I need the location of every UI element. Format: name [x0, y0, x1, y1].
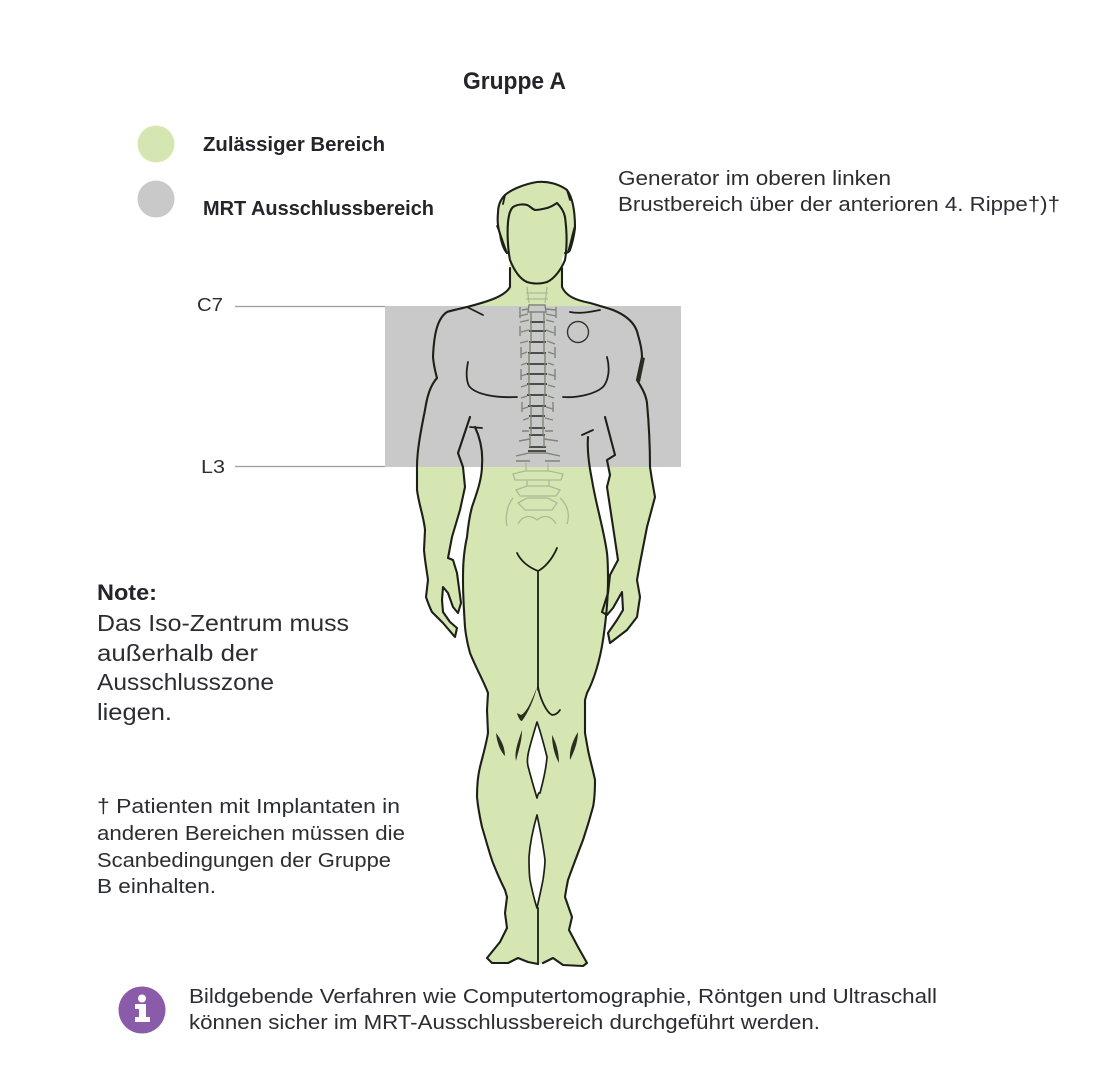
level label C7: C7	[197, 295, 223, 315]
footnote	[97, 796, 405, 898]
legend	[138, 126, 434, 220]
note block: liegen.	[97, 699, 172, 725]
legend swatch: exclusion area	[138, 180, 174, 218]
footnote: Scanbedingungen der Gruppe	[97, 850, 391, 872]
generator implant	[568, 322, 588, 342]
leg gaps	[527, 722, 547, 908]
chest and crotch lines	[467, 307, 609, 964]
level label L3: L3	[201, 457, 225, 477]
footnote: anderen Bereichen müssen die	[97, 823, 405, 845]
footnote: † Patienten mit Implantaten in	[97, 796, 400, 818]
note block	[97, 580, 349, 725]
spine	[516, 287, 560, 461]
right leg outline	[543, 437, 608, 966]
footnote: B einhalten.	[97, 876, 216, 898]
C7 level line	[235, 306, 385, 308]
note block: Note:	[97, 580, 157, 605]
generator note: Generator im oberen linken	[618, 168, 891, 190]
note block: Das Iso-Zentrum muss	[97, 610, 349, 636]
right arm and shoulder outline	[562, 268, 655, 643]
legend swatch: permitted area	[138, 126, 174, 162]
head and hair outline	[498, 182, 575, 253]
icon: info	[118, 986, 166, 1034]
body outline	[417, 182, 655, 966]
knee marks	[496, 730, 578, 763]
imaging note: Bildgebende Verfahren wie Computertomographie, Röntgen und Ultraschall	[189, 986, 937, 1008]
thigh creases	[517, 687, 537, 721]
generator note	[618, 168, 1060, 216]
left arm and shoulder outline	[417, 268, 510, 637]
face outline	[508, 217, 566, 284]
lower spine and pelvis	[506, 463, 568, 526]
note block: Ausschlusszone	[97, 669, 274, 695]
L3 level line	[235, 466, 385, 468]
title: Gruppe A	[463, 68, 566, 95]
generator note: Brustbereich über der anterioren 4. Rippe†)†	[618, 194, 1060, 216]
torso and left leg outline	[463, 427, 538, 964]
body fill	[417, 182, 655, 966]
imaging note	[189, 986, 937, 1034]
legend label: exclusion area: MRT Ausschlussbereich	[203, 198, 434, 220]
exclusion zone band	[385, 306, 681, 467]
body figure with exclusion zone	[235, 182, 681, 966]
legend label: permitted area: Zulässiger Bereich	[203, 134, 385, 156]
shoulder shading	[636, 357, 645, 382]
imaging note: können sicher im MRT-Ausschlussbereich durchgeführt werden.	[189, 1012, 820, 1034]
note block: außerhalb der	[97, 640, 258, 666]
